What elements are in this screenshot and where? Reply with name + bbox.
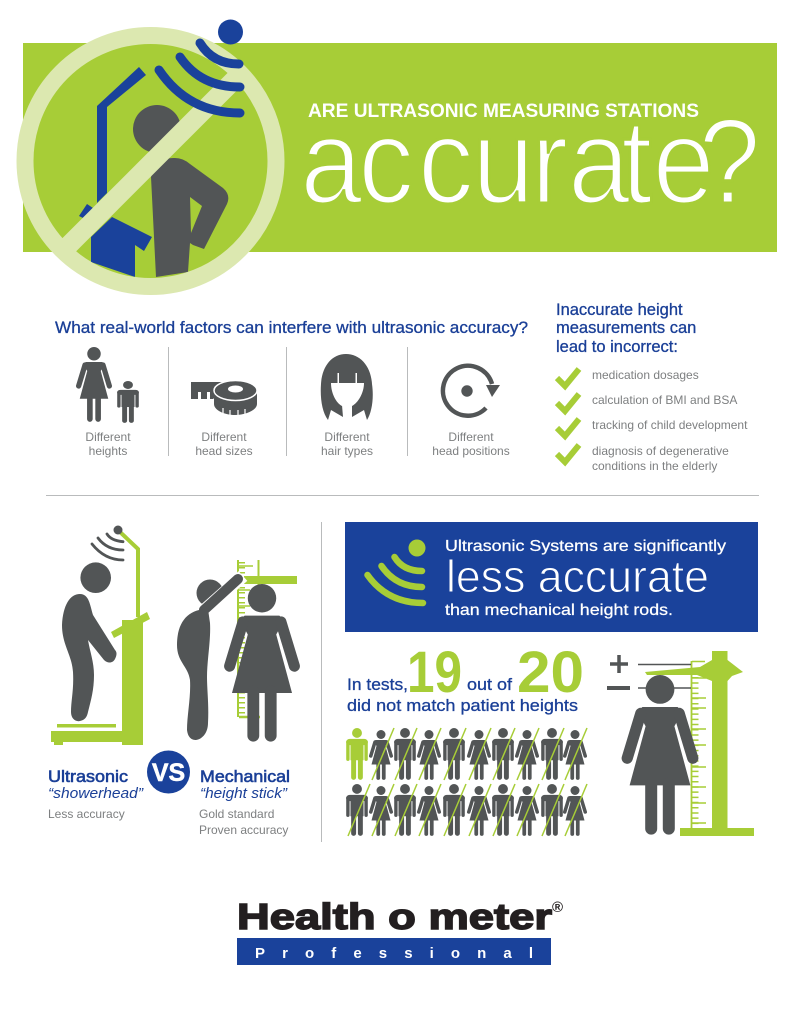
- illustration: height rod with plus/minus error: [607, 651, 754, 836]
- statistic: 19 out of 20: 19: [407, 640, 462, 705]
- statistic: 19 out of 20: 20: [517, 640, 584, 705]
- heading: accurate?: accurate?: [300, 94, 761, 229]
- header banner: [23, 20, 777, 286]
- icon: hair: [321, 354, 373, 420]
- caption: different heights: Different: [85, 430, 131, 444]
- label: mechanical: Gold standard: [199, 807, 274, 821]
- icon: green sensor waves: [368, 540, 426, 603]
- callout: less accurate: Ultrasonic Systems are significantly: [445, 538, 726, 555]
- caption: different head positions: Different: [448, 430, 494, 444]
- icon: different heights: [79, 347, 139, 421]
- heading: factors: What real-world factors can interfere with ultrasonic accuracy?: [55, 319, 528, 337]
- statistic: 19 out of 20: out of: [467, 675, 512, 694]
- badge: VS: VS: [152, 759, 185, 787]
- label: mechanical: [199, 767, 290, 837]
- label: mechanical: Proven accuracy: [199, 823, 288, 837]
- caption: different head positions: head positions: [432, 444, 510, 458]
- caption: different heights: heights: [89, 444, 127, 458]
- label: ultrasonic: “showerhead”: [48, 785, 144, 802]
- illustration: mechanical height stick: [177, 560, 297, 740]
- checklist text: conditions in the elderly: [592, 459, 717, 473]
- logo: Health o meter Professional: Health o meter: [237, 896, 552, 937]
- heading: inaccurate measurements: Inaccurate height: [556, 301, 683, 319]
- badge: VS: [147, 750, 190, 794]
- panel: real-world factors: [55, 319, 528, 458]
- caption: different hair types: Different: [324, 430, 370, 444]
- caption: different head sizes: Different: [201, 430, 247, 444]
- pictogram: 20 people, 19 crossed out: [346, 728, 587, 836]
- logo: Health o meter Professional: [237, 896, 563, 965]
- heading: question line: ARE ULTRASONIC MEASURING STATIONS: [308, 100, 699, 122]
- caption: different head sizes: head sizes: [195, 444, 253, 458]
- panel: consequences checklist: [556, 301, 748, 473]
- icon: rotating head: [443, 366, 500, 416]
- checklist text: diagnosis of degenerative: [592, 444, 729, 458]
- label: ultrasonic: [48, 767, 144, 821]
- checklist text: calculation of BMI and BSA: [592, 393, 737, 407]
- icon: prohibited ultrasonic station: [25, 20, 276, 286]
- label: mechanical: Mechanical: [200, 767, 290, 786]
- checklist text: tracking of child development: [592, 418, 748, 432]
- caption: different hair types: hair types: [321, 444, 373, 458]
- heading: inaccurate measurements: lead to incorrect:: [556, 338, 678, 356]
- logo: Health o meter Professional: Professional: [255, 945, 533, 962]
- callout: less accurate: less accurate: [446, 551, 709, 602]
- statistic: 19 out of 20: In tests,: [347, 675, 408, 694]
- logo: Health o meter Professional: ®: [552, 899, 563, 916]
- callout: less accurate: [345, 522, 758, 632]
- statistic: 19 out of 20: did not match patient heights: [347, 696, 578, 715]
- icon: tape measure: [191, 380, 257, 416]
- icon: check marks: [557, 369, 579, 462]
- label: ultrasonic: Less accuracy: [48, 807, 125, 821]
- statistic: 19 out of 20: [347, 640, 584, 715]
- illustration: ultrasonic station: [51, 526, 150, 745]
- label: ultrasonic: Ultrasonic: [48, 767, 129, 786]
- callout: less accurate: than mechanical height rods.: [445, 602, 673, 619]
- checklist text: medication dosages: [592, 368, 699, 382]
- label: mechanical: “height stick”: [200, 785, 288, 802]
- heading: inaccurate measurements: measurements can: [556, 319, 696, 337]
